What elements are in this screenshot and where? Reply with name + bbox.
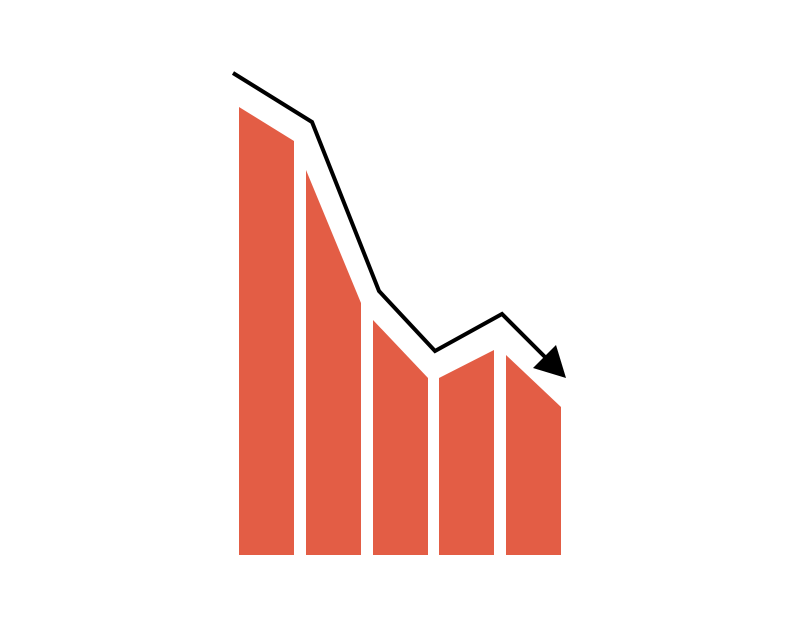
bar 3 [373, 320, 428, 555]
bars [239, 107, 561, 555]
arrow: downward trend line [233, 73, 566, 378]
bar 2 [306, 170, 361, 555]
bar 5 [506, 355, 561, 555]
bar 4 [439, 350, 494, 555]
bar 1 [239, 107, 294, 555]
